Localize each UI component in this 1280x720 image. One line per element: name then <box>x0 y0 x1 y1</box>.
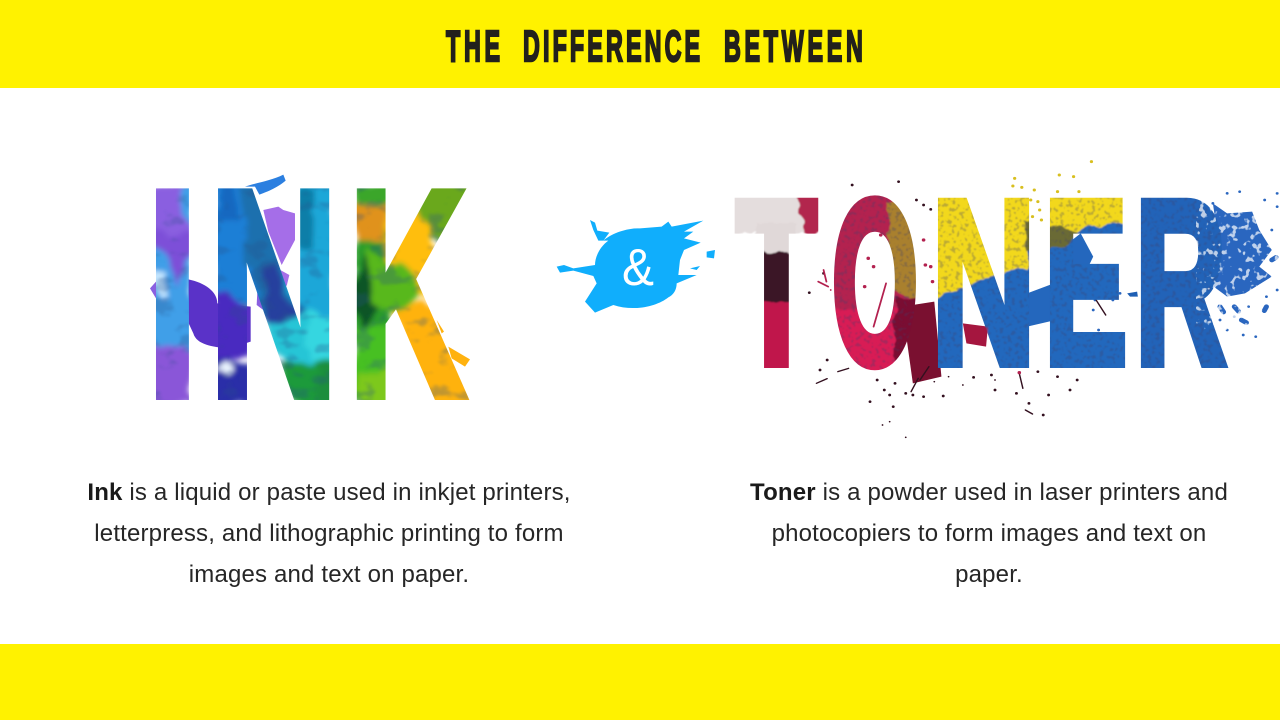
text block: toner description: paper. <box>955 561 1023 588</box>
artwork: TONER lettering <box>720 162 1280 437</box>
title <box>446 22 867 71</box>
title: DIFFERENCE <box>523 22 703 71</box>
text block: toner description: photocopiers to form images and text on <box>772 520 1206 547</box>
text block: ink description <box>87 479 571 588</box>
title: THE <box>446 22 504 71</box>
INK letter fills <box>156 188 470 400</box>
text block: toner description <box>750 479 1228 588</box>
artwork: INK lettering <box>150 174 470 400</box>
ink splashes outside the letters <box>150 175 470 367</box>
TONER letter fills <box>734 195 1228 370</box>
text block: ink description: Ink is a liquid or paste used in inkjet printers, <box>87 479 571 506</box>
toner burst and splatter <box>809 162 1277 437</box>
footer band <box>0 644 1280 720</box>
title: BETWEEN <box>724 22 867 71</box>
burst speckle <box>1190 190 1280 330</box>
text block: ink description: images and text on paper. <box>189 561 469 588</box>
icon: blue brush splash with ampersand <box>557 220 715 313</box>
icon: blue brush splash with ampersand: & <box>622 239 654 297</box>
text block: ink description: letterpress, and lithographic printing to form <box>94 520 564 547</box>
text block: toner description: Toner is a powder used in laser printers and <box>750 479 1228 506</box>
header band <box>0 0 1280 88</box>
